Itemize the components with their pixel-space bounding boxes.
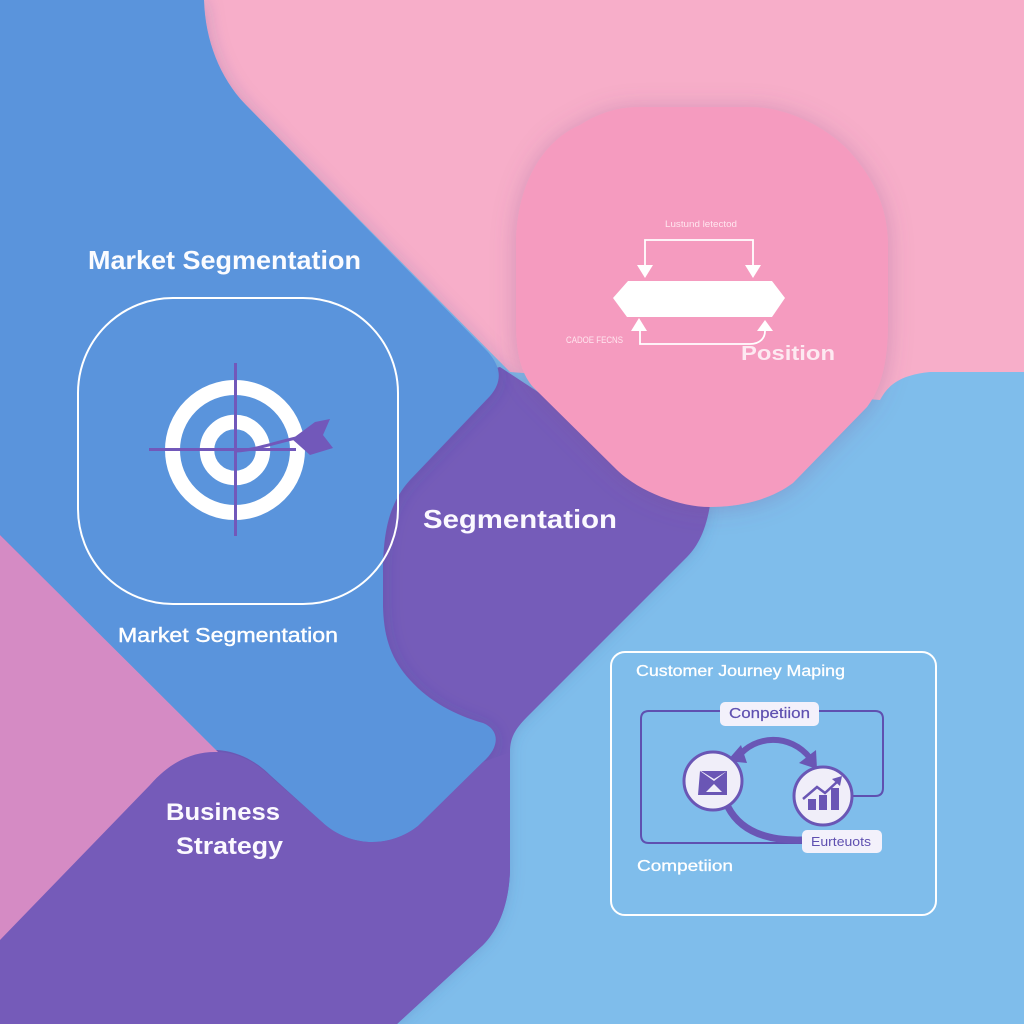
crosshair (149, 363, 296, 536)
panel: top-right pink shape (204, 0, 1024, 400)
pink blob shape (516, 107, 888, 507)
bottom bracket with arrows (631, 318, 773, 344)
positioning diagram (566, 219, 835, 365)
connector frame (641, 711, 883, 843)
pill: Competion (720, 702, 819, 726)
pill: Competion: Conpetiion (729, 705, 810, 722)
bottom-left caption: CADOE FECNS (566, 335, 623, 345)
panel: bottom purple shape (0, 752, 510, 1024)
panel: purple central and lower shape (0, 367, 710, 1024)
heading: Market Segmentation: Market Segmentation (88, 245, 361, 275)
label: Segmentation: Segmentation (423, 504, 617, 534)
top caption: Lustund letectod (665, 219, 737, 229)
top curved arrow (727, 740, 817, 769)
label: Business Strategy (166, 799, 284, 860)
lower curved arrow (728, 807, 802, 840)
panel: left pink shape (0, 535, 218, 960)
pill: Eurteuots (802, 830, 882, 853)
icon: growth chart node (794, 767, 852, 825)
panel title: Customer Journey Maping (636, 663, 845, 680)
label: Position: Position (741, 343, 835, 365)
panel outline (611, 652, 936, 915)
label: Business Strategy: Strategy (176, 833, 284, 860)
icon: envelope node (684, 752, 742, 810)
target rings (172, 388, 298, 512)
label: Competition: Competiion (637, 858, 733, 875)
panel: central pink positioning blob (516, 107, 888, 507)
top bracket with arrows (637, 240, 761, 278)
label: Market Segmentation caption: Market Segmentation (118, 625, 338, 647)
label: Business Strategy: Business (166, 799, 280, 826)
white hexagon bar (613, 281, 785, 317)
arrow (236, 419, 333, 455)
panel: customer journey map (611, 652, 936, 915)
panel: target outline box (78, 298, 398, 604)
pill: Eurteuots: Eurteuots (811, 834, 872, 849)
panel: blue left shape (0, 0, 499, 842)
icon: target with arrow (149, 363, 333, 536)
